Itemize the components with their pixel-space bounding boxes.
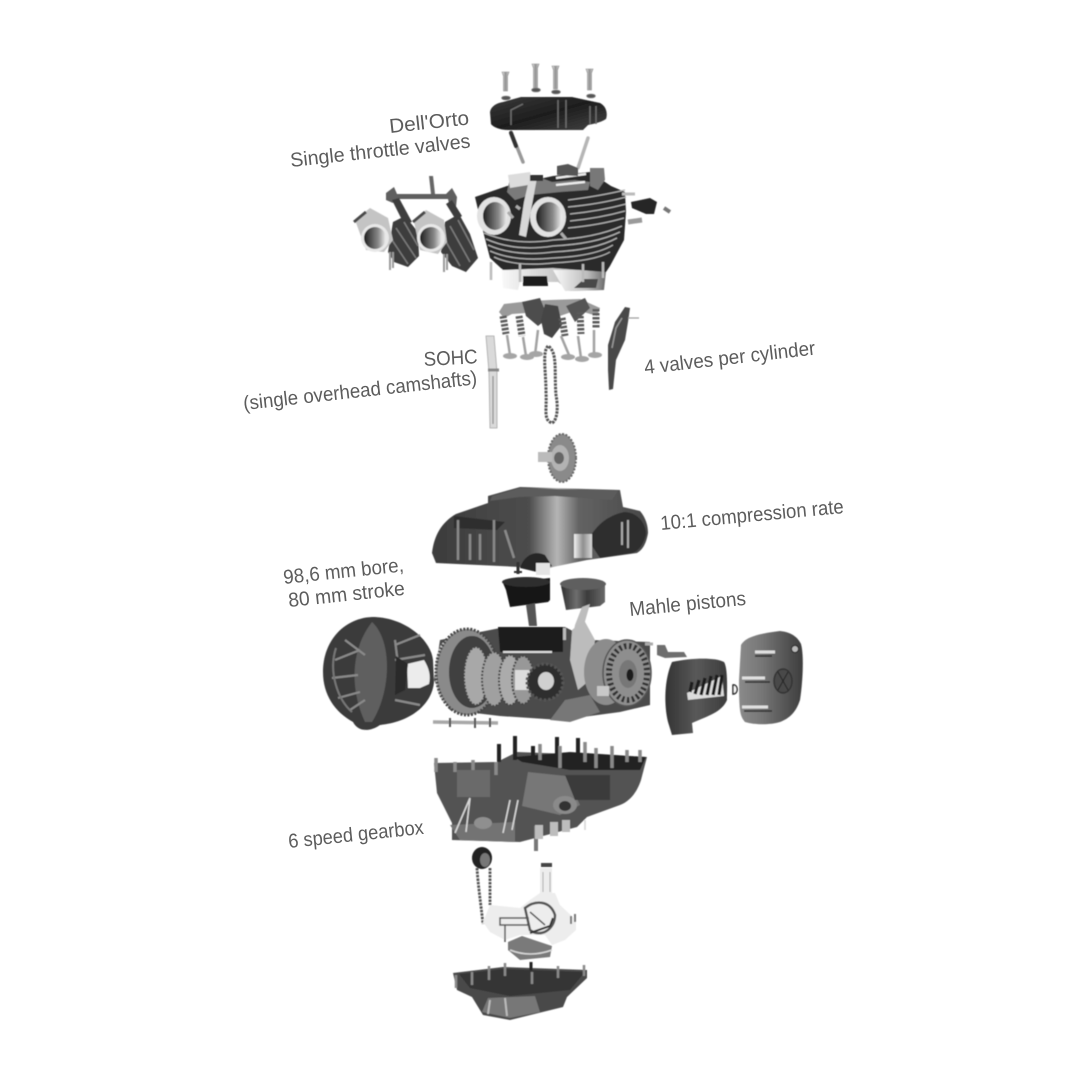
- label: 98,6 mm bore: 98,6 mm bore,: [282, 554, 405, 589]
- label: Mahle pistons: Mahle pistons: [628, 588, 747, 621]
- spark plugs: [511, 132, 588, 168]
- cylinder head and block with fins: [475, 164, 626, 291]
- head valve hardware: [507, 174, 590, 200]
- intake ports: [477, 197, 511, 235]
- throttle bodies: [354, 176, 478, 272]
- label: 80 mm stroke: 80 mm stroke: [287, 578, 406, 612]
- label: single overhead camshafts: (single overhead camshafts): [242, 367, 478, 415]
- cylinder barrels: [475, 172, 626, 272]
- valve cover: [490, 97, 607, 130]
- left chain guide: [486, 336, 499, 428]
- lower crankcase: [434, 736, 647, 851]
- right chain tensioner: [608, 307, 639, 390]
- label: Dell'Orto: Dell'Orto: [388, 107, 470, 138]
- left engine cover: [323, 617, 434, 730]
- cam drive gear: [538, 434, 576, 482]
- label: 4 valves per cylinder: 4 valves per cylinder: [643, 338, 817, 379]
- engine parts stack: [323, 64, 803, 1020]
- pistons and rods: [502, 577, 606, 650]
- cover screws: [502, 64, 596, 100]
- outer engine cover: [733, 631, 803, 724]
- timing chain: [545, 346, 557, 423]
- upper crankcase: [432, 487, 648, 575]
- sensor and fittings: [622, 194, 670, 222]
- label: 6 speed gearbox: 6 speed gearbox: [287, 817, 425, 853]
- central crankshaft and gearbox: [433, 620, 653, 728]
- label: 10:1 compression rate: 10:1 compression rate: [659, 496, 845, 535]
- cylinder skirts: [501, 262, 607, 291]
- stator inner cover: [657, 645, 727, 735]
- label: Single throttle valves: Single throttle valves: [289, 131, 471, 172]
- oil sump: [453, 962, 587, 1020]
- label: SOHC: SOHC: [423, 346, 478, 371]
- oil pump chain sprocket: [472, 847, 492, 924]
- valve train: [499, 298, 602, 362]
- oil pump: [483, 865, 576, 960]
